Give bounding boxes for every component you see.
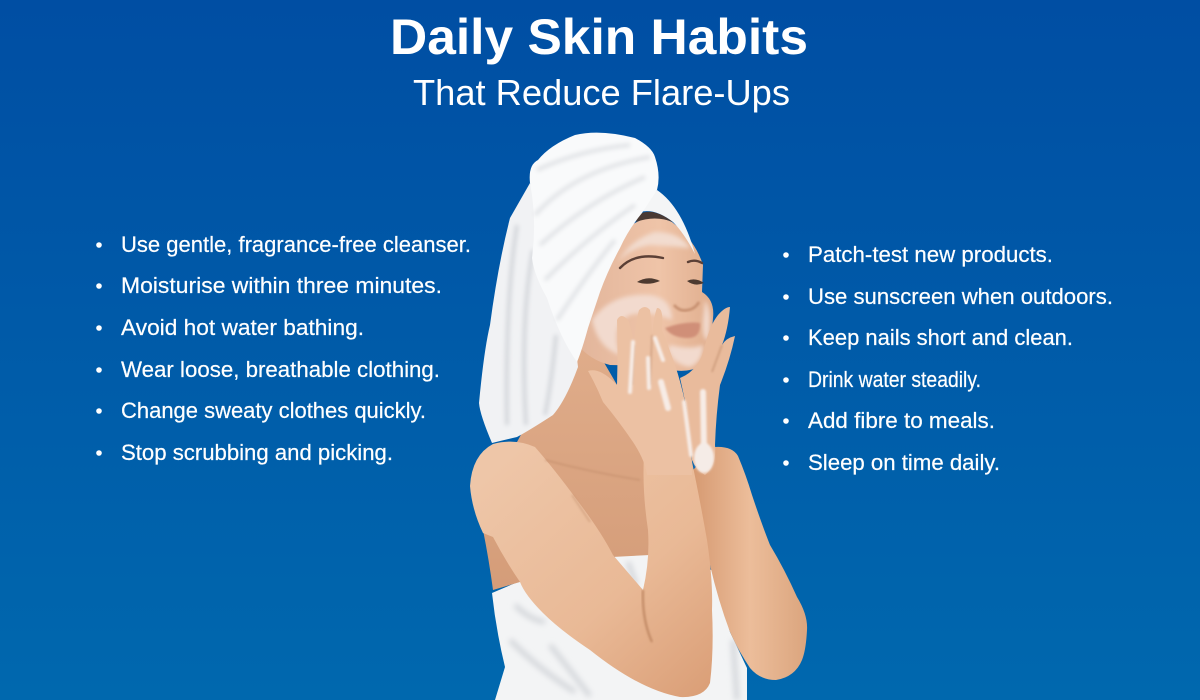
title: [390, 9, 808, 113]
body towel: [492, 554, 747, 700]
eyebrows: [620, 256, 702, 268]
foam on cheeks and chin: [592, 295, 710, 367]
back hand: [680, 307, 735, 475]
habit: sweaty clothes: Change sweaty clothes quickly.: [121, 398, 426, 423]
front hand: [588, 307, 692, 475]
face: [578, 218, 713, 371]
habit: sleep: Sleep on time daily.: [808, 450, 1000, 475]
towel back fold over forehead: [640, 190, 695, 254]
elbow crease: [643, 590, 652, 642]
habit: clothing: Wear loose, breathable clothing.: [121, 357, 440, 382]
back arm: [693, 447, 807, 680]
foam on forehead: [618, 232, 690, 262]
eyes: [637, 278, 704, 285]
collarbone shading: [545, 460, 640, 522]
towel on head: [479, 133, 713, 443]
habit: moisturise: Moisturise within three minutes.: [121, 273, 442, 298]
habit: patch-test: Patch-test new products.: [808, 242, 1053, 267]
heading line 1: Daily Skin Habits: [390, 9, 808, 65]
lips: [665, 323, 700, 338]
heading line 2: That Reduce Flare-Ups: [413, 72, 790, 113]
habit: hot water: Avoid hot water bathing.: [121, 315, 364, 340]
habit: cleanser: Use gentle, fragrance-free cleanser.: [121, 232, 471, 257]
habit: sunscreen: Use sunscreen when outdoors.: [808, 284, 1113, 309]
right habits list: [783, 242, 1113, 475]
nose: [674, 302, 699, 310]
hair line: [636, 212, 673, 222]
towel tail: [479, 183, 578, 443]
habit: water: Drink water steadily.: [808, 367, 981, 392]
front arm and shoulder: [470, 442, 713, 697]
towel turban: [530, 133, 659, 362]
habit: scrubbing: Stop scrubbing and picking.: [121, 440, 393, 465]
illustration: woman washing face: [470, 133, 807, 700]
habit: nails: Keep nails short and clean.: [808, 325, 1073, 350]
left habits list: [96, 232, 471, 465]
soap on hands: [630, 338, 704, 455]
habit: fibre: Add fibre to meals.: [808, 408, 995, 433]
foam at wrist: [694, 443, 714, 473]
torso and neck: [483, 335, 690, 600]
